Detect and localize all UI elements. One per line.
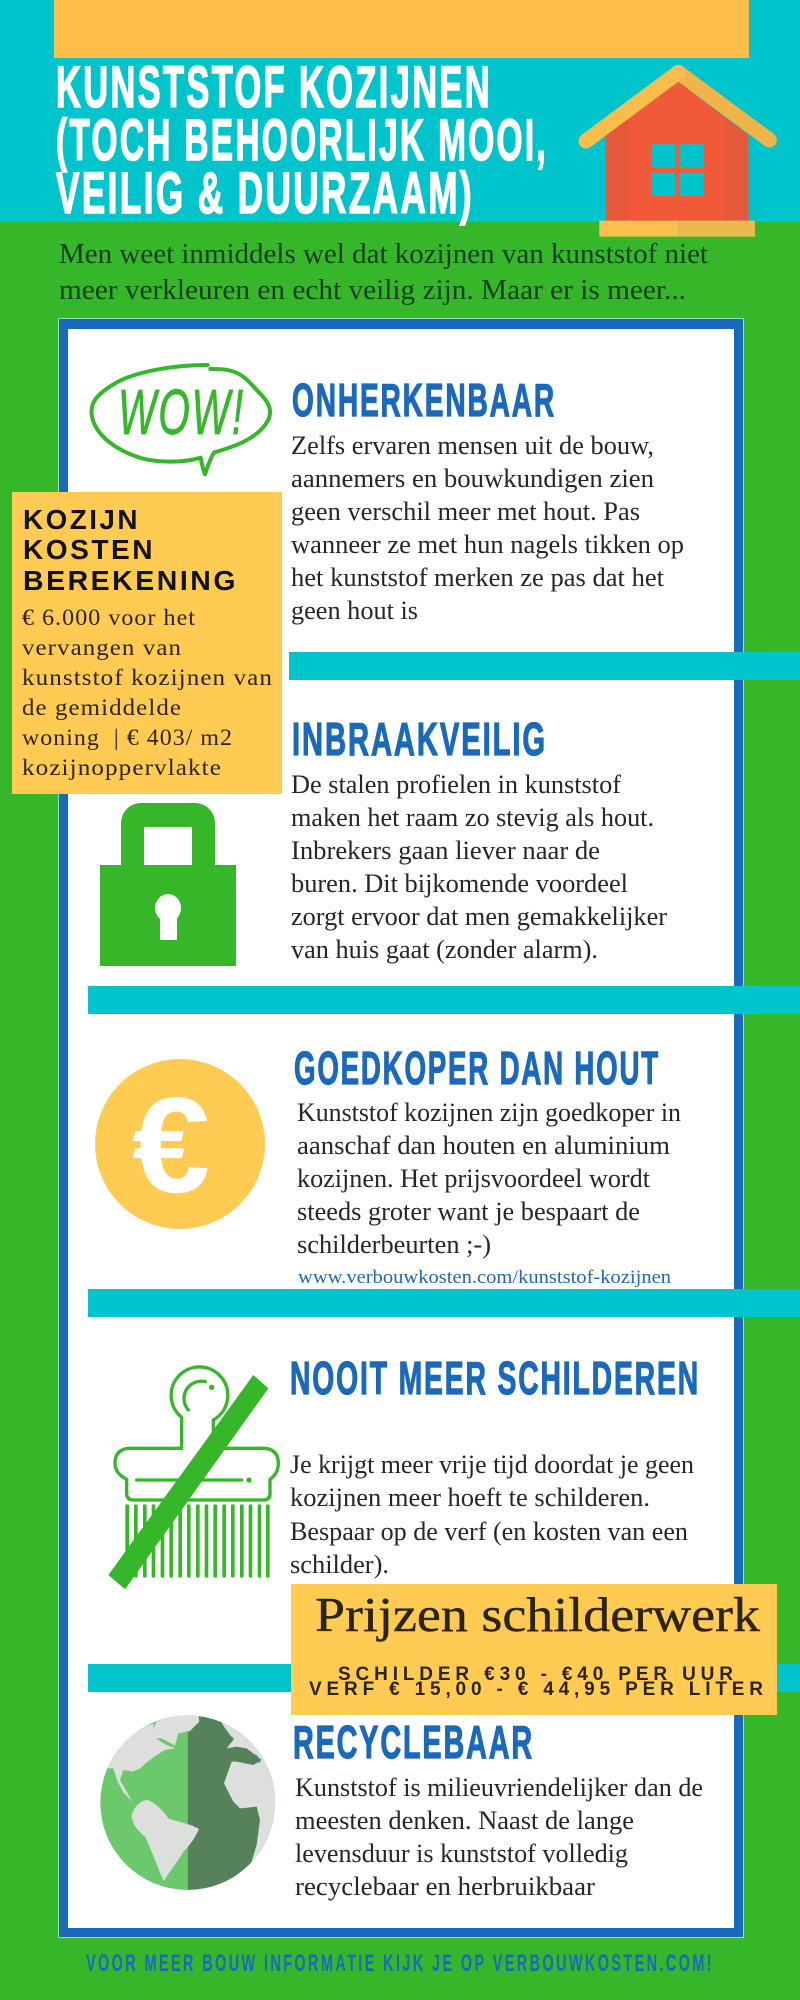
section text: onherkenbaar: geen verschil meer met hout. Pas <box>291 496 640 526</box>
section text: recyclebaar: recyclebaar en herbruikbaar <box>295 1871 595 1901</box>
section text: nooit meer schilderen <box>290 1449 694 1579</box>
callout: kozijn kosten berekening: kunststof kozijnen van <box>22 665 273 690</box>
teal divider 4 <box>88 1664 800 1692</box>
icon: euro coin: € <box>132 1069 210 1221</box>
section text: goedkoper dan hout: aanschaf dan houten en aluminium <box>297 1130 670 1160</box>
section text: onherkenbaar <box>291 430 684 625</box>
section text: recyclebaar: levensduur is kunststof volledig <box>295 1838 628 1868</box>
section text: nooit meer schilderen: Je krijgt meer vrije tijd doordat je geen <box>290 1449 694 1479</box>
section text: goedkoper dan hout: Kunststof kozijnen zijn goedkoper in <box>297 1097 681 1127</box>
teal divider 3 <box>88 1289 800 1317</box>
section text: recyclebaar: meesten denken. Naast de lange <box>295 1805 634 1835</box>
icon: crossed-out paint brush <box>108 1367 278 1589</box>
section text: inbraakveilig: De stalen profielen in kunststof <box>291 769 621 799</box>
section text: goedkoper dan hout <box>297 1097 681 1259</box>
title: VEILIG & DUURZAAM) <box>56 161 474 226</box>
link: verbouwkosten url: www.verbouwkosten.com/kunststof-kozijnen <box>298 1268 671 1288</box>
intro text: Men weet inmiddels wel dat kozijnen van kunststof niet <box>59 238 708 270</box>
icon: house <box>586 72 769 237</box>
section text: goedkoper dan hout: schilderbeurten ;-) <box>297 1229 491 1259</box>
intro text: meer verkleuren en echt veilig zijn. Maar er is meer... <box>59 274 686 306</box>
callout: kozijn kosten berekening: vervangen van <box>22 635 182 660</box>
section text: goedkoper dan hout: kozijnen. Het prijsvoordeel wordt <box>297 1163 651 1193</box>
icon: euro coin <box>95 1059 265 1229</box>
section text: inbraakveilig <box>291 769 667 964</box>
section text: inbraakveilig: zorgt ervoor dat men gemakkelijker <box>291 901 667 931</box>
section text: onherkenbaar: wanneer ze met hun nagels tikken op <box>291 529 684 559</box>
icon: padlock <box>100 803 236 966</box>
callout: kozijn kosten berekening: kozijnoppervlakte <box>22 755 222 780</box>
teal divider 2 <box>88 986 800 1014</box>
section text: recyclebaar: Kunststof is milieuvriendelijker dan de <box>295 1772 703 1802</box>
title: KUNSTSTOF KOZIJNEN <box>56 55 492 120</box>
section text: recyclebaar <box>295 1772 703 1901</box>
section text: inbraakveilig: buren. Dit bijkomende voordeel <box>291 868 628 898</box>
callout: kozijn kosten berekening: KOSTEN <box>23 534 155 565</box>
section heading: inbraakveilig: INBRAAKVEILIG <box>292 713 547 765</box>
title <box>56 55 548 226</box>
icon: globe <box>100 1715 275 1890</box>
icon: wow speech bubble <box>91 365 270 474</box>
section text: goedkoper dan hout: steeds groter want je bespaart de <box>297 1196 640 1226</box>
section text: onherkenbaar: Zelfs ervaren mensen uit de bouw, <box>291 430 654 460</box>
callout: kozijn kosten berekening: BEREKENING <box>23 565 238 596</box>
section text: inbraakveilig: maken het raam zo stevig als hout. <box>291 802 654 832</box>
callout: prijzen schilderwerk <box>291 1584 777 1715</box>
callout: prijzen schilderwerk: SCHILDER €30 - €40 PER UUR <box>338 1664 733 1685</box>
callout: prijzen schilderwerk: VERF € 15,00 - € 44,95 PER LITER <box>309 1679 763 1700</box>
section text: inbraakveilig: van huis gaat (zonder alarm). <box>291 934 598 964</box>
icon: wow speech bubble: WOW! <box>118 376 245 448</box>
section text: nooit meer schilderen: kozijnen meer hoeft te schilderen. <box>290 1482 650 1512</box>
section text: onherkenbaar: aannemers en bouwkundigen zien <box>291 463 654 493</box>
section text: onherkenbaar: het kunststof merken ze pas dat het <box>291 562 665 592</box>
section text: onherkenbaar: geen hout is <box>291 595 418 625</box>
panel: main frame <box>58 318 744 1938</box>
section text: nooit meer schilderen: schilder). <box>290 1549 389 1579</box>
callout: kozijn kosten berekening: € 6.000 voor het <box>22 605 196 630</box>
intro text <box>59 238 708 306</box>
callout: kozijn kosten berekening: woning | € 403/ m2 <box>22 725 233 750</box>
section text: nooit meer schilderen: Bespaar op de verf (en kosten van een <box>290 1516 688 1546</box>
callout: kozijn kosten berekening: KOZIJN <box>23 504 140 535</box>
callout: prijzen schilderwerk: Prijzen schilderwerk <box>315 1587 761 1642</box>
callout: kozijn kosten berekening: de gemiddelde <box>22 695 182 720</box>
teal divider 1 <box>289 652 800 680</box>
header band <box>0 0 800 222</box>
section heading: recyclebaar: RECYCLEBAAR <box>293 1716 534 1768</box>
section text: inbraakveilig: Inbrekers gaan liever naar de <box>291 835 600 865</box>
section heading: onherkenbaar: ONHERKENBAAR <box>292 374 556 426</box>
callout: kozijn kosten berekening <box>12 492 282 794</box>
